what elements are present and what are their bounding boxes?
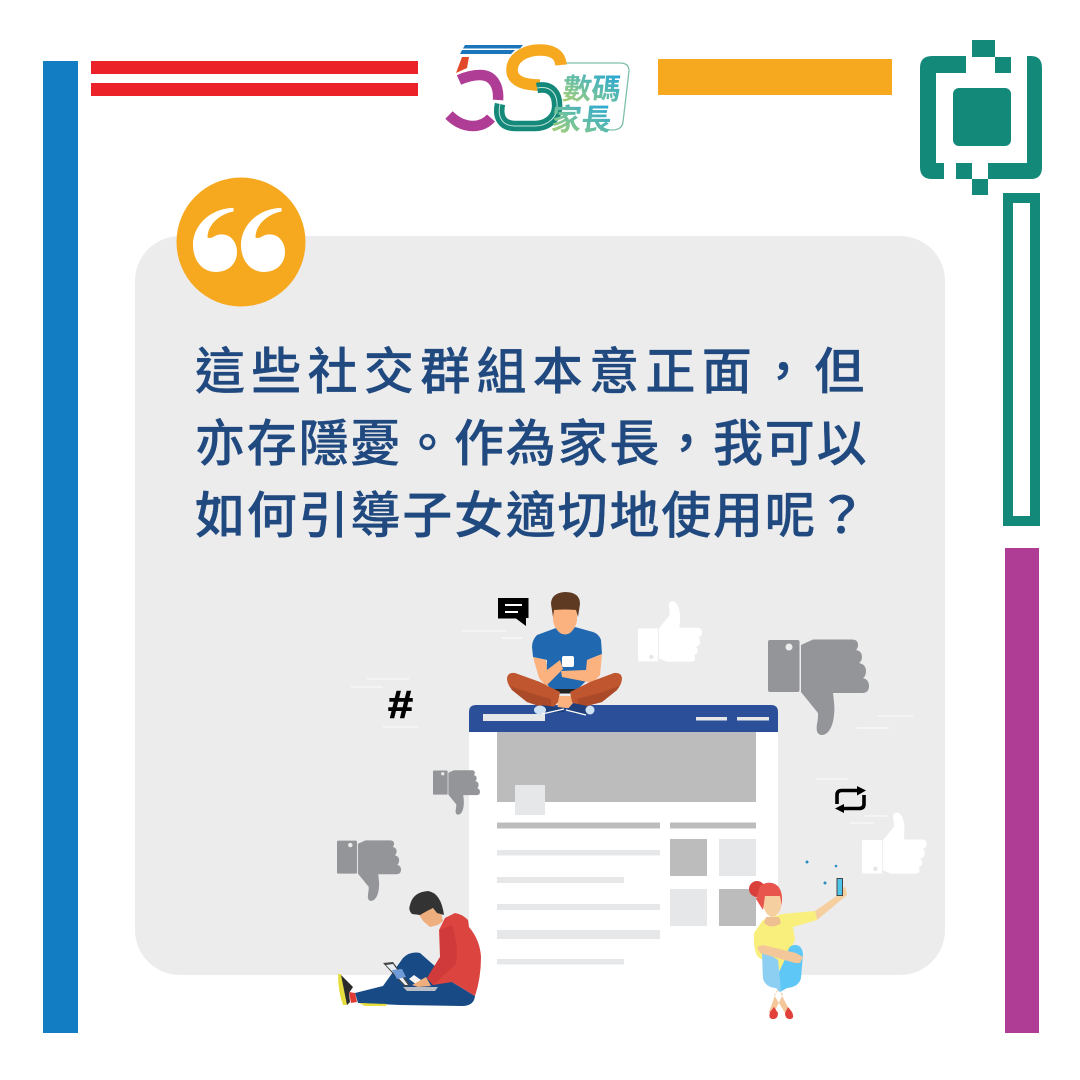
motion lines xyxy=(351,631,913,823)
purple bar xyxy=(1005,548,1039,1033)
red double bars xyxy=(91,61,418,96)
icon: small thumb down xyxy=(433,770,480,815)
icon: repost arrows xyxy=(835,786,866,813)
grey panel xyxy=(135,236,945,975)
icon: hashtag: # xyxy=(388,684,413,727)
orange bar xyxy=(658,59,892,95)
heading: 這些社交群組本意正面，但 xyxy=(195,344,871,400)
person: man sitting on page xyxy=(507,592,622,715)
logo: 55 digital parents xyxy=(449,45,629,137)
teal square icon xyxy=(920,40,1042,195)
logo: 55 digital parents: 家長 xyxy=(550,104,613,137)
logo: 55 digital parents: 數碼 xyxy=(561,73,622,106)
quote badge xyxy=(176,178,306,306)
icon: medium thumb down xyxy=(337,840,401,901)
person: boy with laptop xyxy=(338,891,481,1006)
icon: thumb up top xyxy=(638,601,702,662)
heading: 亦存隱憂。作為家長，我可以 xyxy=(195,416,868,472)
icon: thumb up right xyxy=(862,813,927,874)
web page mockup xyxy=(469,705,778,980)
icon: large thumb down xyxy=(768,640,869,735)
icon: comment bubble xyxy=(498,598,528,626)
person: woman taking selfie xyxy=(749,860,847,1019)
teal outlined bar xyxy=(1008,198,1035,521)
blue bar xyxy=(43,61,78,1033)
heading: 如何引導子女適切地使用呢？ xyxy=(195,488,868,544)
heading xyxy=(195,344,871,544)
